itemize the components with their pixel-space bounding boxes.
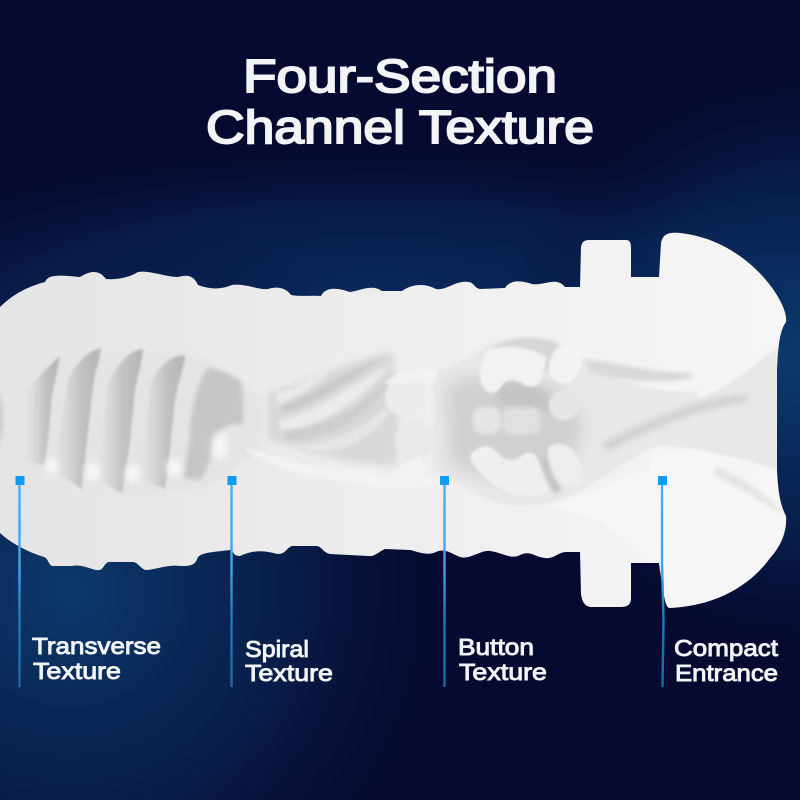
title: Channel Texture: [206, 101, 594, 153]
product cross-section: [0, 233, 788, 608]
callout: button texture: Texture: [459, 659, 547, 685]
left edge shading: [0, 396, 4, 442]
section: transverse texture: [25, 348, 262, 495]
lower lip lobe: [659, 510, 786, 608]
callout: transverse texture: [16, 476, 161, 687]
callout: compact entrance: Entrance: [675, 660, 778, 686]
rib highlights at lower edge: [45, 432, 228, 482]
callout: spiral texture: Spiral: [245, 636, 309, 662]
callout: button texture: Button: [458, 634, 534, 660]
callout: compact entrance: [658, 476, 779, 687]
buttons: [548, 392, 576, 420]
section: spiral texture: [248, 352, 400, 466]
upper teeth: [480, 347, 547, 393]
left buttons: [385, 384, 400, 415]
callout: spiral texture: [228, 476, 333, 687]
section: compact entrance: [586, 342, 786, 608]
shading inside body: [0, 332, 788, 608]
title: Four-Section: [243, 50, 557, 102]
callout: transverse texture: Transverse: [32, 633, 161, 659]
callout: button texture: [440, 476, 547, 687]
title: [206, 50, 594, 153]
callout: transverse texture: Texture: [33, 658, 121, 684]
lower teeth: [470, 446, 550, 496]
section: button texture and funnel base: [385, 338, 778, 506]
callout: compact entrance: Compact: [674, 635, 779, 661]
body silhouette: [0, 233, 786, 608]
callout: spiral texture: Texture: [245, 660, 333, 686]
